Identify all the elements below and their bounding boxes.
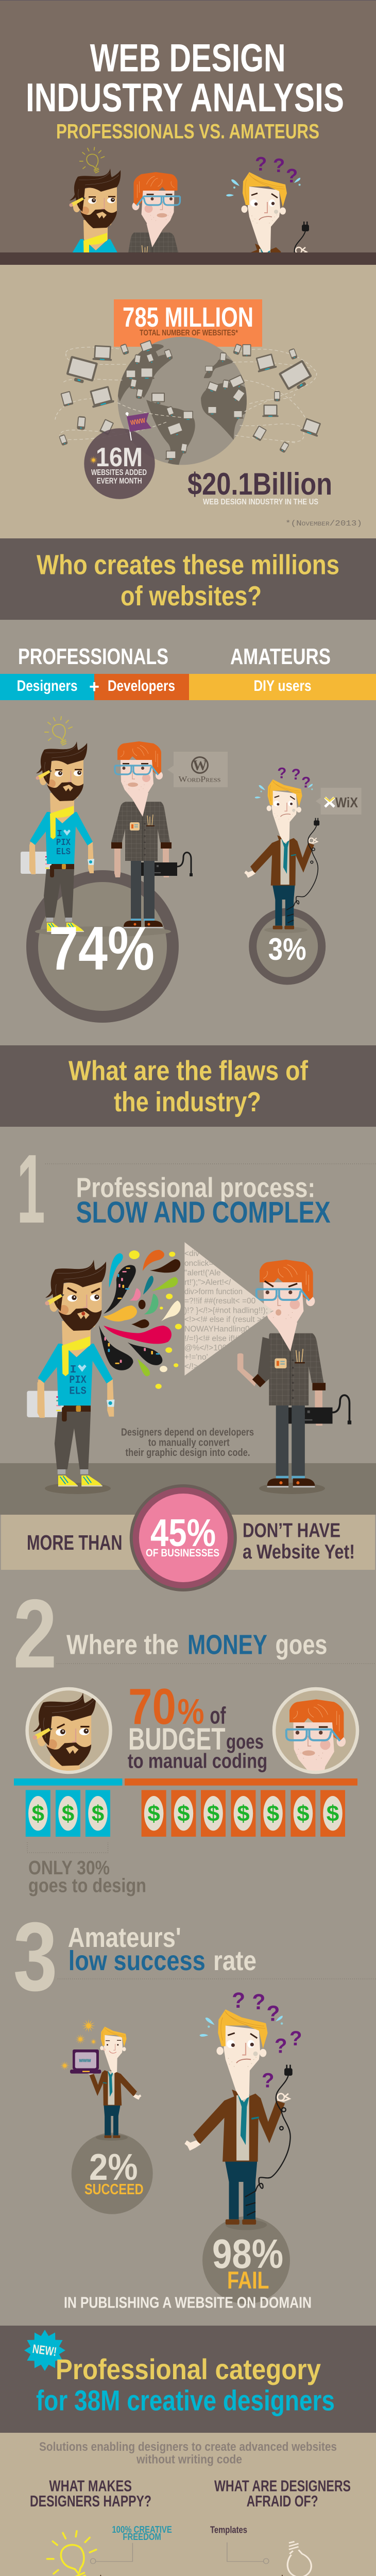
icon: www flag <box>126 412 151 440</box>
heading band: who creates <box>0 538 376 620</box>
afraid designer head <box>262 2574 354 2576</box>
callout: Wix: WiX <box>335 794 358 810</box>
pedestal: 74% <box>32 876 173 1017</box>
dollar bills: design <box>26 1790 110 1837</box>
section 2 heading: goes <box>275 1629 328 1660</box>
characters: designer, developer and amateur <box>69 157 309 252</box>
stat: 16M websites per month: WEBSITES ADDED <box>91 468 147 477</box>
band: 45% of businesses: 45% <box>150 1511 216 1554</box>
section 3 heading <box>13 1902 376 2011</box>
title: WEB DESIGN <box>90 36 286 80</box>
dollar bills: coding: $ <box>237 1801 250 1826</box>
dollar bills: coding: $ <box>267 1801 279 1826</box>
caption: publishing a website: IN PUBLISHING A WEBSITE ON DOMAIN <box>64 2293 312 2311</box>
code beam: div>form function <box>184 1287 243 1296</box>
stat: 70% of budget <box>128 1678 267 1773</box>
intro text: Solutions enabling designers to create advanced websites <box>39 2440 337 2454</box>
role bars: DIY users <box>253 677 311 694</box>
figure: designer <box>21 741 94 932</box>
section 1 heading: Professional process: <box>76 1173 315 1204</box>
dollar bills: coding: $ <box>297 1801 310 1826</box>
labels: what makes designers happy: FREEDOM <box>123 2531 161 2542</box>
bracket and 30% note: goes to design <box>28 1875 146 1897</box>
stat: 785 million: TOTAL NUMBER OF WEBSITES* <box>140 329 238 337</box>
pedestal: 2% succeed <box>72 2133 153 2214</box>
figure: amateur <box>244 765 319 929</box>
labels: what designers fear: Templates <box>210 2524 247 2535</box>
code beam: "alert!('Ale <box>184 1268 220 1278</box>
code beam: +!='no' <box>184 1353 208 1362</box>
role bars: + <box>89 677 99 697</box>
icon: bright lightbulb <box>47 2531 96 2576</box>
column headings <box>18 644 331 669</box>
figure: developer <box>111 741 193 928</box>
role bars: Developers <box>108 677 175 694</box>
icons: connected devices <box>59 340 322 460</box>
section 2 heading: Where the <box>66 1629 179 1660</box>
band: 45% of businesses: DON’T HAVE <box>243 1520 340 1542</box>
dollar bills: coding: $ <box>207 1801 219 1826</box>
heading band: new professional category: Professional category <box>56 2353 321 2385</box>
dark strip under hero <box>0 252 376 265</box>
pedestal: 3% <box>253 912 322 981</box>
icon: www flag: WWW <box>130 416 146 427</box>
portrait: developer <box>272 1687 360 1774</box>
band: 45% of businesses: OF BUSINESSES <box>146 1547 219 1559</box>
pedestal: 98% fail: 98% <box>212 2231 283 2277</box>
panel: professionals vs amateurs <box>0 620 376 1045</box>
section 2 heading: 2 <box>13 1580 57 1689</box>
code beam: onclick= <box>184 1259 213 1268</box>
footnote date: *(November/2013) <box>285 519 362 528</box>
labels: what makes designers happy <box>112 2524 180 2576</box>
connector lines <box>90 2543 282 2576</box>
callout: Wix <box>316 788 362 815</box>
pedestal: 98% fail: FAIL <box>227 2266 269 2294</box>
column headings: AMATEURS <box>230 644 331 669</box>
icon: lightbulb <box>45 717 72 745</box>
callout: WordPress: WordPress <box>178 775 220 784</box>
question marks: ? <box>275 2035 287 2058</box>
figure: successful amateur <box>70 2027 141 2138</box>
stat: 70% of budget: to manual coding <box>128 1750 267 1773</box>
heading band: who creates: of websites? <box>121 581 262 612</box>
badge: new: NEW! <box>31 2342 58 2359</box>
callout: WordPress: W <box>193 758 207 774</box>
code beam: !/=!}<!# else if!# <box>184 1334 240 1343</box>
code beam: </!> <box>184 1362 198 1371</box>
section 3 heading: rate <box>213 1945 257 1976</box>
band: 45% of businesses <box>1 1484 375 1591</box>
icons: success sparks <box>60 2019 97 2070</box>
pedestal: 2% succeed: SUCCEED <box>84 2181 143 2198</box>
stat: industry value: WEB DESIGN INDUSTRY IN THE US <box>203 498 318 506</box>
code beam: )!? }</!>{#not hadling!!); > <box>184 1307 275 1315</box>
globe with dashed routes <box>55 337 317 466</box>
design splash <box>99 1250 182 1389</box>
code beam: NOWAYHandling0:: <box>184 1325 254 1333</box>
role bars <box>0 674 376 700</box>
stat: 785 million <box>114 299 262 347</box>
stat: 70% of budget: 70 <box>128 1678 176 1735</box>
question marks <box>262 2027 302 2092</box>
icon: lightbulb <box>80 147 104 173</box>
dollar bills: coding: $ <box>177 1801 190 1826</box>
heading band: flaws of the industry: What are the flaws of <box>69 1056 309 1087</box>
stat: 785 million: 785 MILLION <box>123 302 253 333</box>
bracket and 30% note <box>27 1842 146 1897</box>
dollar bills: design: $ <box>32 1801 44 1826</box>
stat: 16M websites per month: 16M <box>96 443 143 472</box>
code beam: rt!');">Alert!</ <box>184 1278 231 1287</box>
panel: flaws <box>0 1127 376 2326</box>
section 2 heading <box>13 1580 376 1689</box>
caption: designers depend on developers: Designers depend on developers <box>121 1427 254 1438</box>
section 3 heading: low success <box>69 1945 206 1976</box>
dollar bills: coding: $ <box>327 1801 339 1826</box>
question headings: DESIGNERS HAPPY? <box>30 2492 151 2510</box>
panel: designers happy and afraid <box>0 2433 376 2576</box>
role bars: Designers <box>17 677 78 694</box>
caption: designers depend on developers <box>121 1427 254 1459</box>
section 1 heading <box>17 1134 376 1244</box>
code beam: <div <box>184 1249 199 1258</box>
heading band: flaws of the industry <box>0 1045 376 1127</box>
callout: WordPress <box>167 752 228 787</box>
stat: 70% of budget: goes <box>226 1731 264 1753</box>
intro text <box>39 2440 337 2467</box>
heading band: flaws of the industry: the industry? <box>114 1087 261 1117</box>
stat: 74 percent: 74% <box>49 914 155 983</box>
dollar bills: coding <box>142 1790 345 1837</box>
caption: designers depend on developers: to manually convert <box>148 1437 230 1448</box>
stat: 70% of budget: % <box>177 1691 204 1732</box>
bracket and 30% note: ONLY 30% <box>28 1857 110 1879</box>
dollar bills: coding: $ <box>147 1801 160 1826</box>
section 3 heading: 3 <box>13 1902 58 2011</box>
question headings: AFRAID OF? <box>247 2492 318 2510</box>
panel: website statistics <box>0 265 376 538</box>
code beam <box>184 1242 275 1376</box>
figure: successful amateur: www <box>79 2058 91 2064</box>
pedestal: 98% fail <box>202 2216 290 2304</box>
stat: 16M websites per month: EVERY MONTH <box>97 477 142 485</box>
question marks: ? <box>289 2027 302 2050</box>
stat: industry value: $20.1Billion <box>187 467 332 501</box>
pedestal: 2% succeed: 2% <box>89 2147 138 2188</box>
section 3 heading: Amateurs' <box>68 1922 181 1953</box>
question headings: WHAT MAKES <box>49 2477 132 2495</box>
caption: designers depend on developers: their graphic design into code. <box>126 1447 250 1459</box>
column headings: PROFESSIONALS <box>18 644 168 669</box>
badge: new <box>24 2330 65 2371</box>
heading band: new professional category <box>0 2326 376 2433</box>
band: 45% of businesses: a Website Yet! <box>243 1541 355 1563</box>
icon: dim lightbulb <box>287 2541 311 2576</box>
stat: 70% of budget: BUDGET <box>128 1722 226 1756</box>
code beam: @%</!>100 <box>184 1344 227 1352</box>
stat: 3 percent: 3% <box>268 932 306 967</box>
stat: 70% of budget: of <box>210 1702 226 1729</box>
figure: failing amateur <box>184 1988 292 2225</box>
question marks: ? <box>262 2070 274 2092</box>
band: 45% of businesses: MORE THAN <box>27 1531 123 1554</box>
shadows <box>45 1483 325 1494</box>
title <box>26 36 344 120</box>
dollar bills: design: $ <box>92 1801 104 1826</box>
section 2 heading: MONEY <box>187 1629 267 1660</box>
labels: what makes designers happy: 100% CREATIVE <box>112 2524 172 2535</box>
question headings <box>30 2477 351 2510</box>
figure: developer shouting code <box>257 1260 351 1487</box>
portrait: designer <box>27 1689 111 1781</box>
panel: hero header <box>0 0 376 252</box>
figure: angry designer <box>27 1260 114 1486</box>
budget bars <box>14 1778 357 1786</box>
code beam: <!><!# else if (result >10) <box>184 1315 273 1324</box>
intro text: without writing code <box>136 2453 242 2467</box>
happy designer head <box>28 2574 121 2576</box>
code beam: =?!!if ##(result< =00 <box>184 1297 256 1306</box>
section 1 heading: 1 <box>17 1134 45 1244</box>
raised developer arm <box>237 1337 270 1387</box>
stat: 16M websites per month <box>84 428 155 499</box>
dollar bills: design: $ <box>62 1801 74 1826</box>
